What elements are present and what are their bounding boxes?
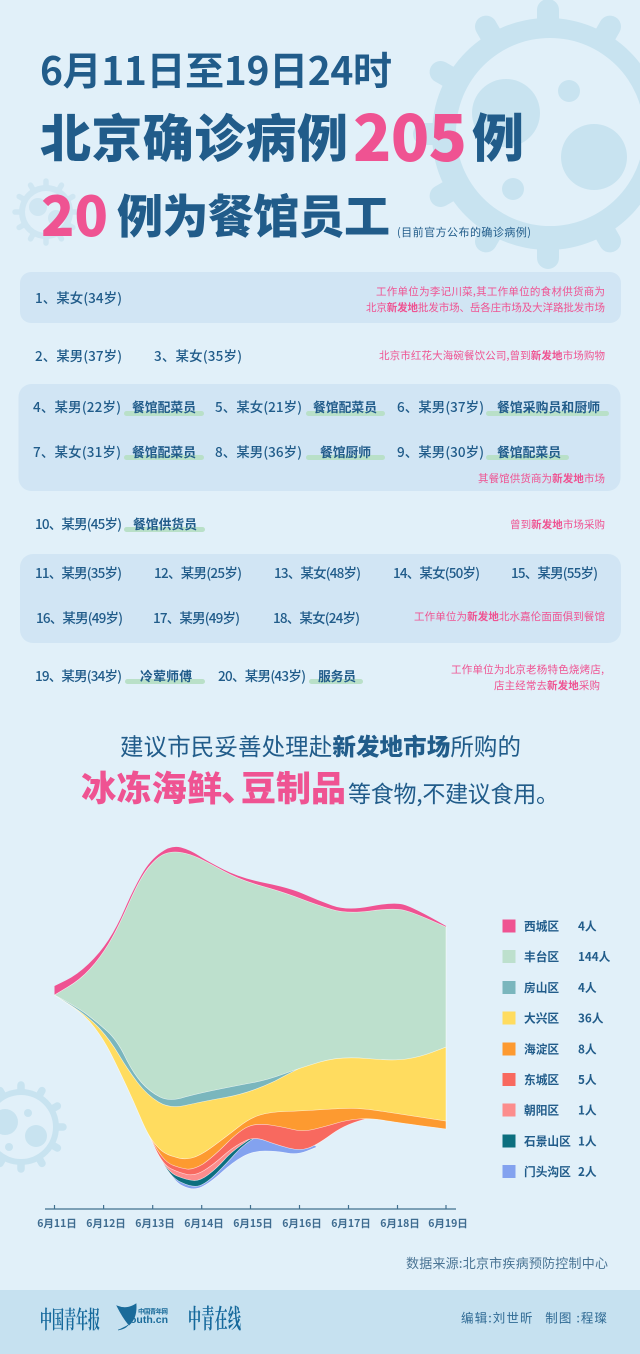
row: cases 19 and 20: 店主经常去新发地采购	[494, 678, 600, 693]
title line 3: 例为餐馆员工	[117, 181, 390, 247]
row: case 10: 10、某男(45岁)	[35, 513, 122, 533]
panel: cases 11 to 18: 12、某男(25岁)	[154, 562, 242, 582]
legend: 4人	[578, 979, 597, 996]
panel: cases 4 to 9: 餐馆配菜员	[132, 397, 196, 416]
legend	[502, 918, 611, 1180]
row: cases 2 and 3: 2、某男(37岁)	[35, 345, 122, 365]
title line 2: 205	[353, 89, 467, 180]
panel: case 1: 北京新发地批发市场、岳各庄市场及大洋路批发市场	[366, 300, 605, 315]
legend: 36人	[578, 1010, 604, 1026]
chart axis	[37, 1205, 468, 1231]
chart axis: 6月13日	[135, 1216, 175, 1231]
title line 2: 例	[472, 97, 524, 172]
row: cases 19 and 20	[35, 662, 604, 693]
row: cases 19 and 20: 冷荤师傅	[140, 666, 192, 685]
chart axis: 6月12日	[86, 1216, 126, 1231]
row: case 10: 曾到新发地市场采购	[510, 517, 605, 532]
title note: (目前官方公布的确诊病例)	[397, 224, 531, 240]
credits: 编辑:刘世昕 制图 :程璨	[461, 1308, 607, 1326]
row: cases 19 and 20: 19、某男(34岁)	[35, 665, 122, 685]
chart axis: 6月17日	[331, 1216, 371, 1231]
panel: cases 11 to 18: 13、某女(48岁)	[274, 562, 361, 582]
panel: cases 4 to 9: 餐馆配菜员	[497, 442, 561, 461]
chart axis: 6月18日	[380, 1216, 420, 1231]
panel: cases 11 to 18: 18、某女(24岁)	[273, 607, 360, 627]
area: 海淀区	[148, 1100, 446, 1169]
legend: 石景山区	[524, 1132, 571, 1150]
area: 朝阳区	[148, 1100, 253, 1181]
legend: 1人	[578, 1132, 597, 1150]
area: 丰台区	[54, 852, 446, 1100]
icon: small virus gear near title	[15, 181, 77, 243]
legend: 大兴区	[524, 1010, 559, 1026]
area: 东城区	[148, 1100, 370, 1175]
panel: cases 4 to 9: 7、某女(31岁)	[33, 441, 121, 461]
panel: cases 4 to 9: 9、某男(30岁)	[397, 441, 484, 461]
panel: cases 4 to 9: 餐馆厨师	[320, 442, 371, 461]
legend: 4人	[578, 918, 597, 934]
panel: cases 4 to 9: 餐馆采购员和厨师	[497, 397, 600, 416]
panel: cases 4 to 9	[18, 384, 620, 491]
legend: 2人	[578, 1163, 597, 1180]
icon: bottom-left virus gear	[0, 1085, 63, 1169]
panel: cases 11 to 18: 17、某男(49岁)	[153, 607, 240, 627]
panel: cases 4 to 9: 其餐馆供货商为新发地市场	[478, 471, 605, 486]
advice line 1: 建议市民妥善处理赴新发地市场所购的	[120, 728, 521, 762]
footer band	[0, 1290, 640, 1354]
logo: youth.cn: outh.cn	[130, 1314, 168, 1326]
title line 2	[40, 89, 524, 180]
panel: cases 4 to 9: 4、某男(22岁)	[33, 396, 121, 416]
title line 3	[41, 172, 390, 252]
title line 3: 20	[41, 172, 108, 252]
area: 房山区	[54, 995, 300, 1107]
panel: case 1: 工作单位为李记川菜,其工作单位的食材供货商为	[376, 284, 605, 299]
panel: cases 4 to 9: 餐馆配菜员	[132, 442, 196, 461]
legend: 5人	[578, 1071, 597, 1088]
row: cases 19 and 20: 服务员	[318, 666, 356, 685]
chart axis: 6月19日	[428, 1216, 468, 1231]
icon: large virus gear	[424, 10, 640, 258]
chart axis: 6月11日	[37, 1216, 77, 1231]
legend: 东城区	[524, 1071, 559, 1088]
area: 西城区	[54, 847, 446, 995]
chart axis: 6月16日	[282, 1216, 322, 1231]
chart axis: 6月14日	[184, 1216, 224, 1231]
legend: 朝阳区	[524, 1102, 559, 1118]
panel: cases 11 to 18: 16、某男(49岁)	[36, 607, 123, 627]
legend: 门头沟区	[524, 1163, 571, 1180]
row: cases 19 and 20: 20、某男(43岁)	[218, 665, 306, 685]
chart: streamgraph of cases by district	[54, 847, 446, 1189]
legend: 8人	[578, 1040, 597, 1058]
panel: cases 4 to 9: 5、某女(21岁)	[215, 396, 302, 416]
row: case 10: 餐馆供货员	[133, 514, 197, 533]
logo: youth.cn: 中国青年网	[138, 1306, 168, 1316]
area: 石景山区	[148, 1100, 253, 1186]
panel: cases 4 to 9: 6、某男(37岁)	[397, 396, 484, 416]
panel: cases 11 to 18: 工作单位为新发地北水嘉伦面面俱到餐馆	[414, 609, 605, 624]
legend: 海淀区	[524, 1040, 559, 1058]
legend: 西城区	[524, 918, 559, 934]
logo: 中国青年报: 中国青年报	[40, 1301, 100, 1336]
panel: cases 11 to 18: 11、某男(35岁)	[35, 562, 122, 582]
advice line 2: 豆制品	[241, 761, 346, 812]
panel: cases 11 to 18	[20, 554, 621, 643]
advice line 2: 冰冻海鲜	[81, 761, 222, 812]
legend: 144人	[578, 948, 611, 965]
legend: 房山区	[524, 979, 559, 996]
legend: 丰台区	[524, 948, 559, 965]
panel: cases 4 to 9: 8、某男(36岁)	[215, 441, 302, 461]
area: 大兴区	[54, 995, 446, 1159]
panel: cases 11 to 18: 14、某女(50岁)	[393, 562, 480, 582]
legend: 1人	[578, 1102, 597, 1118]
advice line 2: 等食物,不建议食用。	[348, 775, 559, 809]
data source: 数据来源:北京市疾病预防控制中心	[406, 1253, 608, 1272]
area: 门头沟区	[148, 1100, 317, 1189]
panel: case 1: 1、某女(34岁)	[35, 287, 122, 307]
title line 2: 北京确诊病例	[40, 98, 348, 172]
advice line 2	[81, 761, 559, 812]
title line 1: 6月11日至19日24时	[40, 41, 392, 97]
logo: 中青在线: 中青在线	[188, 1298, 241, 1336]
panel: case 1	[20, 272, 621, 323]
row: cases 19 and 20: 工作单位为北京老杨特色烧烤店,	[451, 662, 604, 677]
row: cases 2 and 3: 3、某女(35岁)	[154, 345, 242, 365]
panel: cases 11 to 18: 15、某男(55岁)	[511, 562, 598, 582]
chart axis: 6月15日	[233, 1216, 273, 1231]
row: cases 2 and 3: 北京市红花大海碗餐饮公司,曾到新发地市场购物	[379, 348, 605, 363]
logo: youth.cn	[117, 1304, 168, 1330]
panel: cases 4 to 9: 餐馆配菜员	[313, 397, 377, 416]
row: cases 2 and 3	[35, 345, 605, 365]
row: case 10	[35, 513, 605, 533]
advice line 2: 、	[221, 761, 256, 812]
